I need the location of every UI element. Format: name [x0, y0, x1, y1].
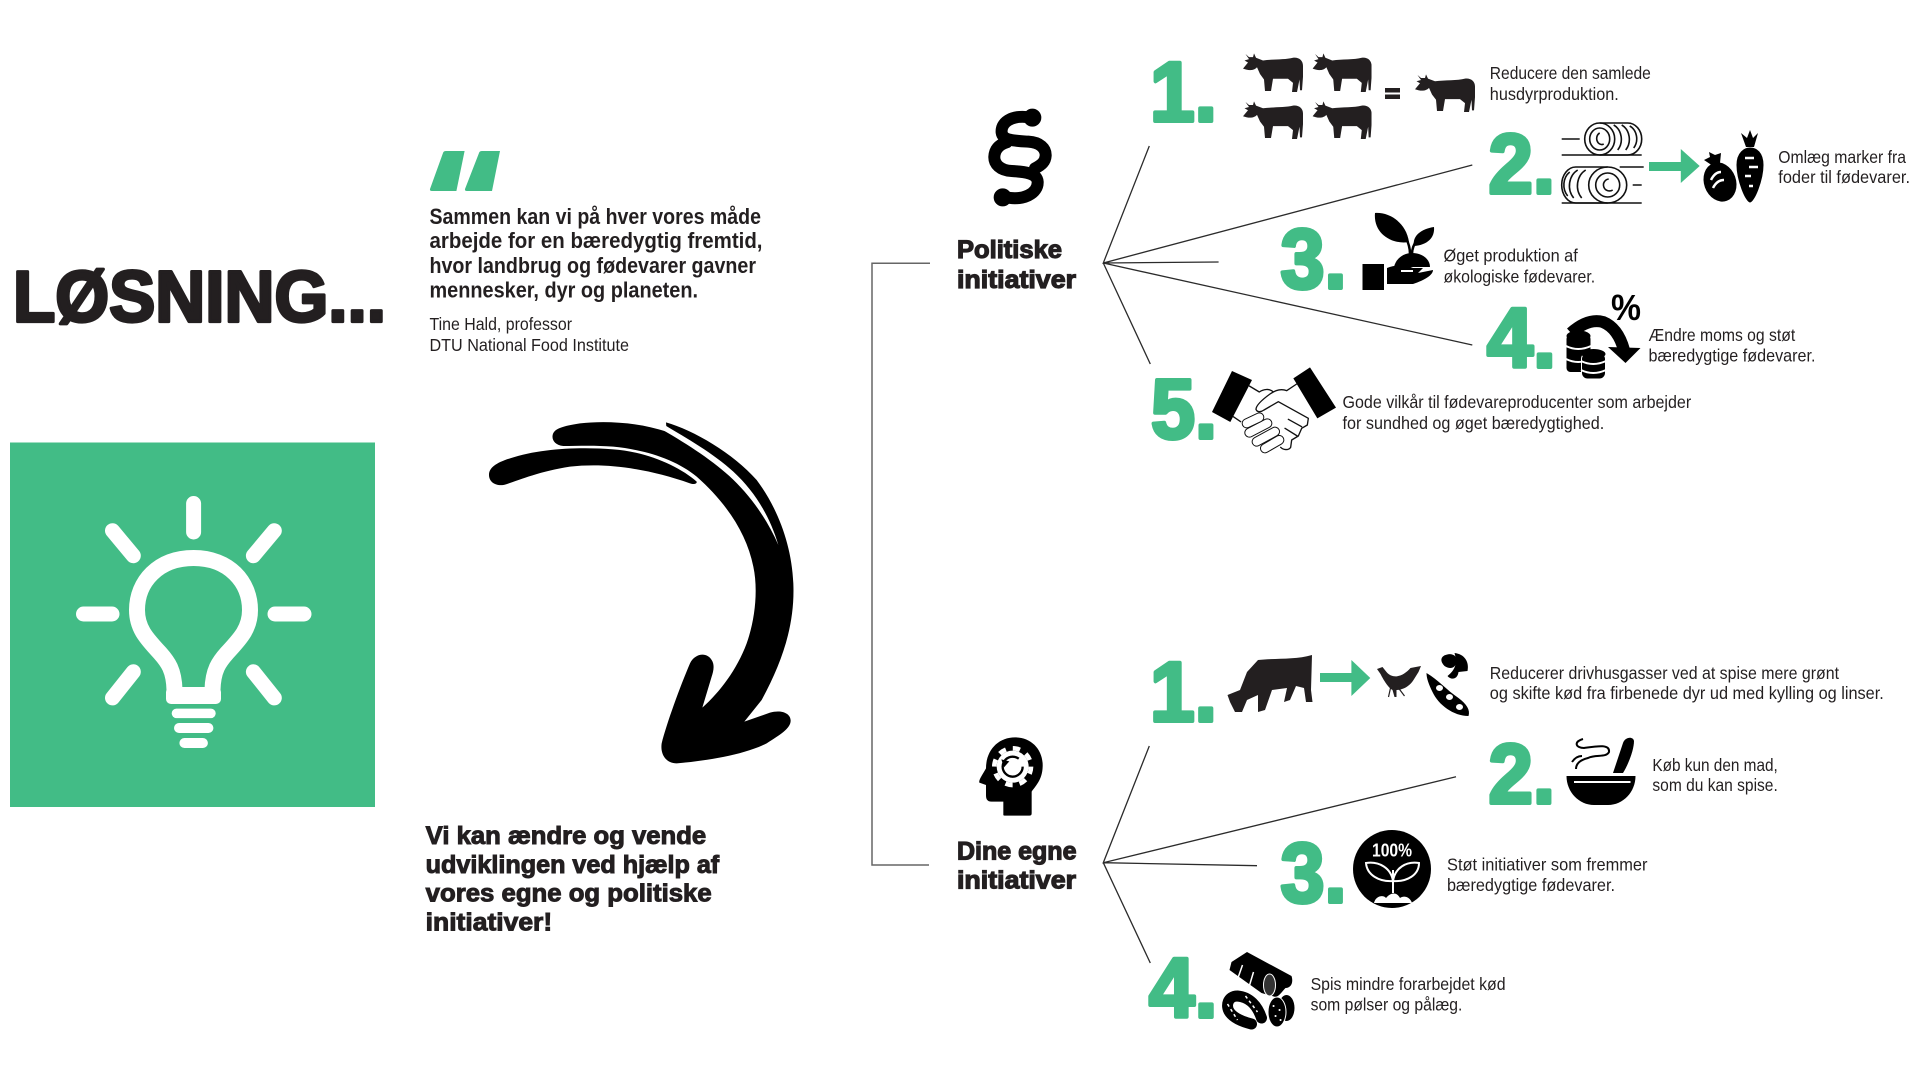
quote attribution: Tine Hald, professor — [430, 314, 572, 334]
text: good conditions — [1342, 392, 1691, 433]
title: LØSNING... — [13, 258, 386, 338]
text: support initiatives: Støt initiativer som fremmer — [1447, 855, 1648, 875]
arrow: hay to food — [1649, 149, 1700, 183]
icon: processed meat — [1228, 952, 1294, 1027]
number 4: 4. — [1149, 941, 1218, 1035]
icon: plant in hand — [1362, 213, 1434, 290]
text: buy only what you eat: som du kan spise. — [1652, 775, 1778, 795]
icon: bowl with steam — [1566, 738, 1636, 805]
text: eat less processed meat: Spis mindre forarbejdet kød — [1311, 974, 1506, 994]
icon: 100 percent organic badge: 100% — [1372, 840, 1412, 860]
call to action text: udviklingen ved hjælp af — [426, 851, 720, 879]
icon: four cows equal one cow — [1243, 53, 1475, 139]
icon: carrot and beet — [1698, 130, 1764, 206]
text: convert fields: foder til fødevarer. — [1778, 167, 1910, 187]
icon: head with gear — [979, 737, 1043, 816]
panel: politiske initiativer — [957, 45, 1910, 456]
text: convert fields — [1778, 147, 1910, 187]
text: reduce livestock production: husdyrproduktion. — [1490, 84, 1619, 104]
heading: politiske initiativer: initiativer — [957, 266, 1076, 294]
icon: green panel with light bulb — [10, 442, 375, 807]
quote text: arbejde for en bæredygtig fremtid, — [430, 228, 762, 253]
text: change VAT — [1648, 325, 1816, 366]
quote text: Sammen kan vi på hver vores måde — [430, 204, 761, 229]
text: organic production — [1444, 246, 1595, 287]
quote attribution: DTU National Food Institute — [430, 335, 629, 355]
number 2: 2. — [1488, 727, 1555, 821]
text: buy only what you eat: Køb kun den mad, — [1652, 755, 1778, 775]
number 4: 4. — [1487, 291, 1556, 385]
text: eat less processed meat — [1311, 974, 1506, 1015]
number 1: 1. — [1150, 645, 1217, 739]
text: reduce livestock production — [1490, 63, 1651, 104]
text: convert fields: Omlæg marker fra — [1778, 147, 1906, 167]
call to action text: initiativer! — [426, 908, 552, 936]
text: support initiatives — [1447, 855, 1648, 895]
heading: dine egne initiativer — [957, 837, 1077, 894]
quote text: hvor landbrug og fødevarer gavner — [430, 253, 756, 278]
number 3: 3. — [1280, 212, 1346, 306]
quote text — [430, 204, 762, 302]
text: change VAT: Ændre moms og støt — [1648, 325, 1795, 345]
text: good conditions: Gode vilkår til fødevareproducenter som arbejder — [1342, 392, 1691, 412]
call to action text: vores egne og politiske — [426, 880, 712, 908]
icon: handshake — [1212, 367, 1336, 450]
text: good conditions: for sundhed og øget bæredygtighed. — [1342, 413, 1604, 433]
text: reduce greenhouse gases — [1490, 663, 1884, 703]
icon: quotation marks — [430, 151, 500, 191]
text: reduce greenhouse gases: og skifte kød fra firbenede dyr ud med kylling og linser. — [1490, 683, 1884, 703]
text: reduce greenhouse gases: Reducerer drivhusgasser ved at spise mere grønt — [1490, 663, 1839, 683]
icon: hay bales — [1562, 123, 1644, 203]
heading: politiske initiativer — [957, 236, 1076, 294]
number 2: 2. — [1488, 117, 1555, 211]
call to action text — [426, 822, 720, 936]
heading: dine egne initiativer: initiativer — [957, 866, 1076, 894]
number 3: 3. — [1280, 826, 1346, 920]
text: reduce livestock production: Reducere den samlede — [1490, 63, 1651, 83]
text: change VAT: bæredygtige fødevarer. — [1648, 346, 1816, 366]
number 5: 5. — [1151, 362, 1217, 456]
text: support initiatives: bæredygtige fødevarer. — [1447, 875, 1615, 895]
text: buy only what you eat — [1652, 755, 1778, 795]
text: eat less processed meat: som pølser og pålæg. — [1311, 995, 1462, 1015]
icon: coins and falling percent — [1566, 287, 1641, 379]
icon: 100 percent organic badge — [1353, 830, 1431, 908]
number 1: 1. — [1150, 45, 1217, 139]
heading: dine egne initiativer: Dine egne — [957, 837, 1077, 865]
heading: politiske initiativer: Politiske — [957, 236, 1062, 264]
icon: coins and falling percent: % — [1611, 287, 1641, 328]
text: organic production: økologiske fødevarer. — [1444, 267, 1595, 287]
icon: paragraph sign — [994, 114, 1046, 201]
arrow: large curved brush arrow — [489, 422, 793, 763]
text: organic production: Øget produktion af — [1444, 246, 1578, 266]
icon: cow to chicken and legumes — [1228, 653, 1469, 716]
panel: dine egne initiativer — [957, 645, 1884, 1035]
quote text: mennesker, dyr og planeten. — [430, 278, 698, 302]
call to action text: Vi kan ændre og vende — [426, 822, 706, 850]
quote attribution — [430, 314, 629, 355]
